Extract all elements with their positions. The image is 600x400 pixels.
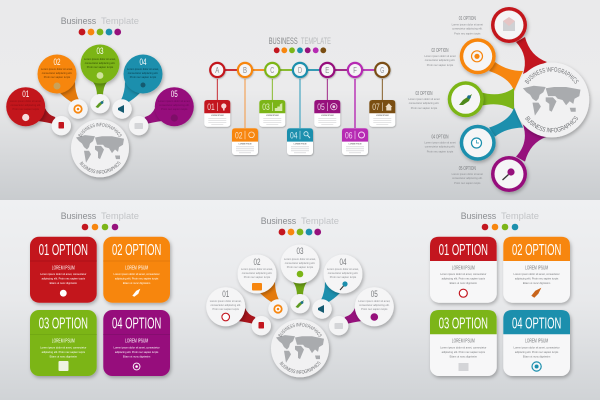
option 04 text: 04 OPTION (432, 134, 449, 140)
card 02: 02 OPTION (112, 242, 161, 259)
bubble 03: Lorem ipsum dolor sit amet, (84, 57, 116, 61)
world map (523, 86, 580, 116)
option 03 text: 03 OPTION (416, 91, 433, 97)
option 01 text: consectetur adipiscing elit. (452, 26, 483, 30)
card 02: Lorem ipsum dolor sit amet, consectetur (514, 272, 560, 276)
card 04: Etiam ut nunc dignissim (523, 354, 550, 358)
card 01: 01 (207, 102, 215, 112)
small icon circles (252, 294, 348, 335)
bubble 02: Lorem ipsum dolor sit amet, (241, 267, 273, 271)
bubble 04: Proin nec sapien turpis (130, 75, 157, 79)
card 03: LOREM IPSUM (52, 339, 75, 345)
bubble 02 (238, 254, 276, 294)
globe circle with curved captions (514, 62, 592, 141)
bubble 01: Proin nec sapien turpis (13, 107, 40, 111)
node B (237, 62, 253, 78)
card 02: LOREM IPSUM (239, 143, 252, 145)
card 02: LOREM IPSUM (125, 265, 148, 271)
card 02 (103, 237, 170, 303)
timeline links (217, 70, 382, 128)
option 03 text: consectetur adipiscing elit. (409, 101, 439, 105)
world circle with curved captions (70, 119, 132, 181)
option 02 text (424, 48, 456, 67)
card 04: LOREM IPSUM (125, 339, 148, 345)
card 03: 03 OPTION (39, 316, 88, 332)
card 01: Lorem ipsum dolor sit amet, consectetur (440, 272, 486, 276)
curved caption top: BUSINESS INFOGRAPHICS (278, 322, 322, 337)
option 02 text: 02 OPTION (432, 48, 449, 54)
bubble 02: consectetur adipiscing elit. (42, 71, 72, 75)
card 04: adipiscing elit. Proin nec sapien turpis (115, 350, 159, 354)
card 03: LOREM IPSUM (266, 115, 279, 117)
bubble 04 (124, 54, 162, 94)
option 05 text: consectetur adipiscing elit. (452, 176, 483, 180)
connectors (480, 37, 547, 162)
bubble 01: 01 (222, 289, 229, 299)
option 02 text: Proin nec sapien turpis (427, 63, 454, 67)
curved caption bottom: BUSINESS INFOGRAPHICS (280, 361, 320, 374)
bubble 02: consectetur adipiscing elit. (242, 271, 272, 275)
bubble 03: Proin nec sapien turpis (87, 65, 114, 69)
card 02: adipiscing elit. Proin nec sapien turpis (115, 277, 159, 281)
card 03: Lorem ipsum dolor sit amet, consectetur (440, 346, 486, 350)
option 01 text: 01 OPTION (459, 16, 476, 22)
panel: white option cards with colour headers (430, 211, 570, 376)
panel: solid colour option cards (30, 211, 170, 376)
card 01: 01 OPTION (39, 242, 88, 259)
option 02 text: Lorem ipsum dolor sit amet (424, 54, 456, 58)
heading: Template (101, 16, 139, 27)
card 01 (430, 237, 497, 303)
option 01 text: Proin nec sapien turpis (454, 32, 481, 36)
card 04 (287, 128, 313, 155)
heading: BUSINESS (269, 36, 298, 46)
card 02: adipiscing elit. Proin nec sapien turpis (515, 277, 559, 281)
node D: D (298, 66, 302, 75)
card 02: LOREM IPSUM (525, 265, 548, 271)
heading: Template (301, 216, 339, 227)
card 07: LOREM IPSUM (376, 115, 389, 117)
bubble 04: consectetur adipiscing elit. (128, 71, 158, 75)
option 05 text: Proin nec sapien turpis (454, 181, 481, 185)
bubble 02: 02 (254, 257, 260, 267)
card 01: adipiscing elit. Proin nec sapien turpis (442, 277, 486, 281)
node G (374, 62, 390, 78)
card 01 (204, 100, 230, 127)
panel: coloured bubble diagram (6, 16, 197, 181)
card 04: Lorem ipsum dolor sit amet, consectetur (114, 346, 160, 350)
option 04 text: consectetur adipiscing elit. (425, 144, 455, 148)
heading: Business (261, 216, 296, 227)
bubble 01 (6, 87, 45, 126)
option 05 text: 05 OPTION (459, 166, 476, 172)
bubble 05: consectetur adipiscing elit. (359, 303, 390, 307)
panel: A to G timeline (204, 36, 395, 155)
bubble 05: 05 (171, 89, 178, 99)
panel: radial options diagram (408, 7, 592, 196)
bubble 03: Lorem ipsum dolor sit amet, (284, 257, 316, 261)
bubble 01 (206, 287, 245, 326)
small icon circles (52, 94, 148, 135)
ring 02 with target icon (460, 38, 496, 74)
bubble 01: Proin nec sapien turpis (213, 307, 240, 311)
bubble 03 (280, 244, 320, 284)
card 03 (430, 310, 497, 376)
bubble 02: Proin nec sapien turpis (44, 75, 71, 79)
node G: G (380, 66, 384, 75)
card 05 (314, 100, 340, 127)
heading: Business (461, 211, 496, 222)
option 01 text: Lorem ipsum dolor sit amet (452, 22, 483, 26)
card 03: Etiam ut nunc dignissim (50, 354, 77, 358)
bubble 01: consectetur adipiscing elit. (210, 303, 241, 307)
card 02: Lorem ipsum dolor sit amet, consectetur (114, 272, 160, 276)
heading (461, 211, 539, 230)
card 04: Etiam ut nunc dignissim (123, 354, 150, 358)
curved caption top: BUSINESS INFOGRAPHICS (524, 67, 578, 84)
card 03 (259, 100, 285, 127)
option 05 text (452, 166, 483, 185)
card 03 (30, 310, 97, 376)
card 04 (503, 310, 570, 376)
card 02 (503, 237, 570, 303)
bubble 04: Lorem ipsum dolor sit amet, (127, 67, 159, 71)
world circle with curved captions (270, 319, 332, 381)
card 01: 01 OPTION (439, 242, 488, 259)
option 05 text: Lorem ipsum dolor sit amet (452, 172, 483, 176)
bubble 05: Lorem ipsum dolor sit amet, (358, 299, 391, 303)
node A: A (215, 66, 220, 75)
bubble 02: Lorem ipsum dolor sit amet, (41, 67, 73, 71)
option 03 text (408, 91, 440, 110)
option 04 text: Lorem ipsum dolor sit amet (424, 140, 456, 144)
curved caption top: BUSINESS INFOGRAPHICS (78, 122, 122, 137)
node B: B (243, 66, 247, 75)
card 03: 03 (262, 102, 270, 112)
node F (347, 62, 363, 78)
bubble 05: consectetur adipiscing elit. (159, 103, 190, 107)
bubble 04: 04 (340, 257, 346, 267)
card 02: Etiam ut nunc dignissim (123, 281, 150, 285)
heading: Business (61, 16, 96, 27)
card 03: Lorem ipsum dolor sit amet, consectetur (40, 346, 86, 350)
bubble 04: consectetur adipiscing elit. (328, 271, 358, 275)
card 04: LOREM IPSUM (525, 339, 548, 345)
bubble 01: Lorem ipsum dolor sit amet, (10, 99, 42, 103)
curved caption bottom: BUSINESS INFOGRAPHICS (525, 116, 578, 132)
card 06: LOREM IPSUM (349, 143, 362, 145)
node F: F (353, 66, 357, 75)
heading: Template (501, 211, 539, 222)
connectors (238, 282, 362, 325)
ring 05 with magnifier icon (491, 156, 527, 192)
heading: Business (61, 211, 96, 222)
card 07: 07 (372, 102, 380, 112)
bubble 04: Lorem ipsum dolor sit amet, (327, 267, 359, 271)
card 01: Lorem ipsum dolor sit amet, consectetur (40, 272, 86, 276)
node D (292, 62, 308, 78)
ring 03 with rocket icon (448, 81, 484, 117)
card 03: adipiscing elit. Proin nec sapien turpis (42, 350, 86, 354)
bubble 02: 02 (54, 57, 60, 67)
bubble 01: 01 (22, 89, 29, 99)
option 04 text: Proin nec sapien turpis (427, 150, 454, 154)
card 01: LOREM IPSUM (452, 265, 475, 271)
bubble 05: Proin nec sapien turpis (361, 307, 388, 311)
ring 04 with clock icon (460, 125, 496, 161)
card 03: adipiscing elit. Proin nec sapien turpis (442, 350, 486, 354)
card 02: 02 (235, 130, 242, 140)
card 02: 02 OPTION (512, 242, 561, 259)
bubble 05 (355, 287, 394, 326)
card 03: Etiam ut nunc dignissim (450, 354, 477, 358)
connectors (38, 82, 162, 125)
card 06: 06 (345, 130, 352, 140)
node C: C (270, 66, 274, 75)
bubble 03: consectetur adipiscing elit. (285, 261, 315, 265)
option 03 text: Lorem ipsum dolor sit amet (408, 97, 440, 101)
world map (76, 135, 124, 163)
card 02 (232, 128, 258, 155)
curved caption bottom: BUSINESS INFOGRAPHICS (80, 161, 120, 174)
bubble 04 (324, 254, 362, 294)
node E: E (325, 66, 329, 75)
node A (209, 62, 226, 78)
bubble 05 (155, 87, 194, 126)
card 01: Etiam ut nunc dignissim (50, 281, 77, 285)
bubble 02: Proin nec sapien turpis (244, 275, 271, 279)
heading (61, 16, 139, 35)
node C (264, 62, 280, 78)
heading (269, 36, 331, 53)
bubble 02 (38, 54, 76, 94)
node E (319, 62, 335, 78)
bubble 01: consectetur adipiscing elit. (10, 103, 41, 107)
bubble 04: Proin nec sapien turpis (330, 275, 357, 279)
heading (261, 216, 339, 235)
heading (61, 211, 139, 230)
bubble 05: 05 (371, 289, 378, 299)
bubble 05: Lorem ipsum dolor sit amet, (158, 99, 191, 103)
bubble 03: consectetur adipiscing elit. (85, 61, 115, 65)
card 01: Etiam ut nunc dignissim (450, 281, 477, 285)
bubble 05: Proin nec sapien turpis (161, 107, 188, 111)
card 01: LOREM IPSUM (52, 265, 75, 271)
card 04: adipiscing elit. Proin nec sapien turpis (515, 350, 559, 354)
bubble 03: 03 (296, 246, 304, 256)
option 02 text: consectetur adipiscing elit. (425, 58, 455, 62)
ring 01 with envelope icon (491, 7, 527, 43)
bubble 03 (80, 44, 120, 84)
card 07 (369, 100, 395, 127)
heading: Template (101, 211, 139, 222)
card 03: LOREM IPSUM (452, 339, 475, 345)
bubble 01: Lorem ipsum dolor sit amet, (210, 299, 242, 303)
world map (276, 335, 324, 363)
option 04 text (424, 134, 456, 154)
card 05: 05 (317, 102, 325, 112)
bubble 03: Proin nec sapien turpis (287, 265, 314, 269)
bubble 04: 04 (140, 57, 146, 67)
card 02: Etiam ut nunc dignissim (523, 281, 550, 285)
card 04: Lorem ipsum dolor sit amet, consectetur (514, 346, 560, 350)
card 04: 04 OPTION (112, 316, 161, 332)
card 04: LOREM IPSUM (294, 143, 307, 145)
option 03 text: Proin nec sapien turpis (411, 106, 438, 110)
panel: white bubble diagram (206, 216, 397, 381)
bubble 03: 03 (96, 46, 104, 56)
card 04: 04 (290, 130, 298, 140)
card 01 (30, 237, 97, 303)
option 01 text (452, 16, 483, 36)
card 04: 04 OPTION (512, 316, 561, 332)
card 01: adipiscing elit. Proin nec sapien turpis (42, 277, 86, 281)
card 06 (342, 128, 368, 155)
card 04 (103, 310, 170, 376)
card 05: LOREM IPSUM (321, 115, 334, 117)
card 01: LOREM IPSUM (211, 115, 224, 117)
card 03: 03 OPTION (439, 316, 488, 332)
heading: TEMPLATE (301, 36, 331, 46)
